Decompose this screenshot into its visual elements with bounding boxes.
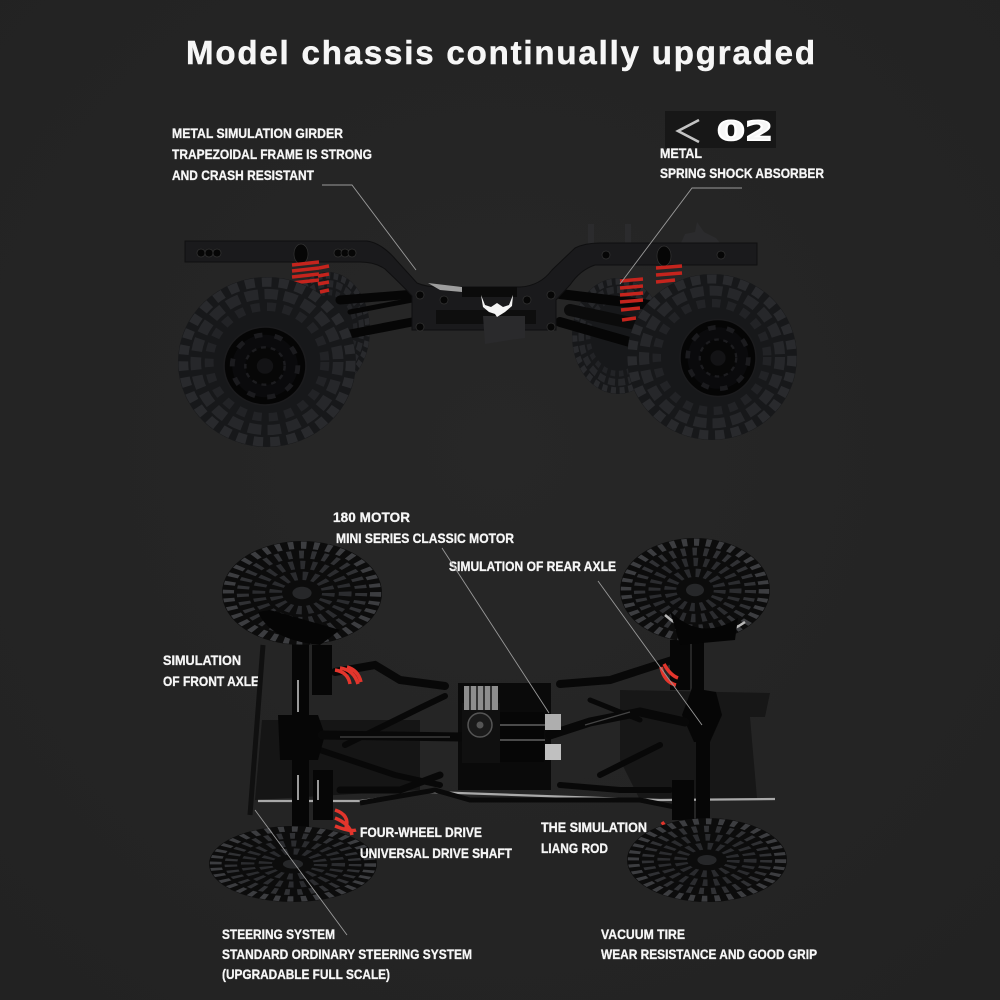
label: vacuum tire: VACUUM TIRE — [601, 927, 685, 942]
label: front axle — [163, 653, 259, 689]
label: metal spring shock absorber: METAL — [660, 146, 702, 161]
label: metal simulation girder: METAL SIMULATION GIRDER — [172, 126, 343, 141]
label: vacuum tire: WEAR RESISTANCE AND GOOD GRIP — [601, 947, 817, 962]
top-view chassis — [209, 538, 787, 902]
leader: motor — [442, 548, 549, 713]
label: front axle: OF FRONT AXLE — [163, 674, 259, 689]
front axle — [278, 640, 333, 856]
centre plate — [458, 683, 551, 790]
label: 180 motor — [333, 510, 514, 546]
red shock springs — [335, 664, 678, 840]
bolts — [197, 244, 725, 331]
label: 180 motor: MINI SERIES CLASSIC MOTOR — [336, 531, 514, 546]
label: steering system: STANDARD ORDINARY STEERING SYSTEM — [222, 947, 472, 962]
label: liang rod: LIANG ROD — [541, 841, 608, 856]
frame rail — [185, 241, 757, 330]
left front tyre — [178, 277, 356, 447]
label: four-wheel drive: UNIVERSAL DRIVE SHAFT — [360, 846, 513, 861]
left rim — [224, 327, 306, 405]
top-right tyre — [620, 538, 770, 642]
motor and gearbox — [462, 686, 561, 763]
rear axle — [670, 635, 722, 825]
label: four-wheel drive — [360, 825, 513, 861]
title: Model chassis continually upgraded — [186, 34, 815, 71]
upper and lower arms — [320, 660, 672, 790]
upright posts behind rear frame — [588, 222, 720, 244]
label: steering system — [222, 927, 472, 982]
inner wheel highlights — [665, 615, 745, 634]
label: 180 motor: 180 MOTOR — [333, 510, 410, 525]
silver side rail — [258, 792, 775, 801]
label: metal spring shock absorber: SPRING SHOCK ABSORBER — [660, 166, 824, 181]
logo: bull head — [481, 295, 513, 317]
bottom-right tyre — [627, 818, 787, 902]
label: metal simulation girder: AND CRASH RESISTANT — [172, 168, 315, 183]
right rim — [680, 320, 756, 396]
steering rod — [250, 645, 263, 815]
label: metal simulation girder — [172, 126, 372, 183]
suspension links — [340, 294, 650, 345]
rear tyre behind left — [286, 272, 370, 388]
red shock springs — [292, 262, 682, 320]
label: front axle: SIMULATION — [163, 653, 241, 668]
label: metal simulation girder: TRAPEZOIDAL FRAME IS STRONG — [172, 147, 372, 162]
label: vacuum tire — [601, 927, 817, 962]
right front tyre — [627, 274, 797, 440]
front chassis plate — [255, 720, 420, 800]
label: four-wheel drive: FOUR-WHEEL DRIVE — [360, 825, 482, 840]
top-left tyre — [222, 541, 382, 645]
badge: 02: 02 — [717, 116, 773, 147]
label: steering system: (UPGRADABLE FULL SCALE) — [222, 967, 390, 982]
label: rear axle: SIMULATION OF REAR AXLE — [449, 559, 616, 574]
rear tyre behind right — [572, 278, 664, 394]
label: liang rod: THE SIMULATION — [541, 820, 647, 835]
leader: shock absorber — [620, 188, 742, 284]
label: steering system: STEERING SYSTEM — [222, 927, 335, 942]
leader: rear axle — [598, 581, 702, 725]
badge: 02 — [665, 111, 776, 148]
leader: girder — [322, 185, 416, 270]
drive shaft — [322, 712, 685, 737]
centre gearbox block — [436, 310, 536, 324]
bottom-left tyre — [209, 826, 377, 902]
leader: steering — [255, 810, 347, 935]
silver highlight — [428, 283, 462, 292]
label: liang rod — [541, 820, 647, 856]
label: metal spring shock absorber — [660, 146, 824, 181]
side-view chassis — [178, 222, 797, 447]
rear chassis plate — [620, 690, 775, 800]
